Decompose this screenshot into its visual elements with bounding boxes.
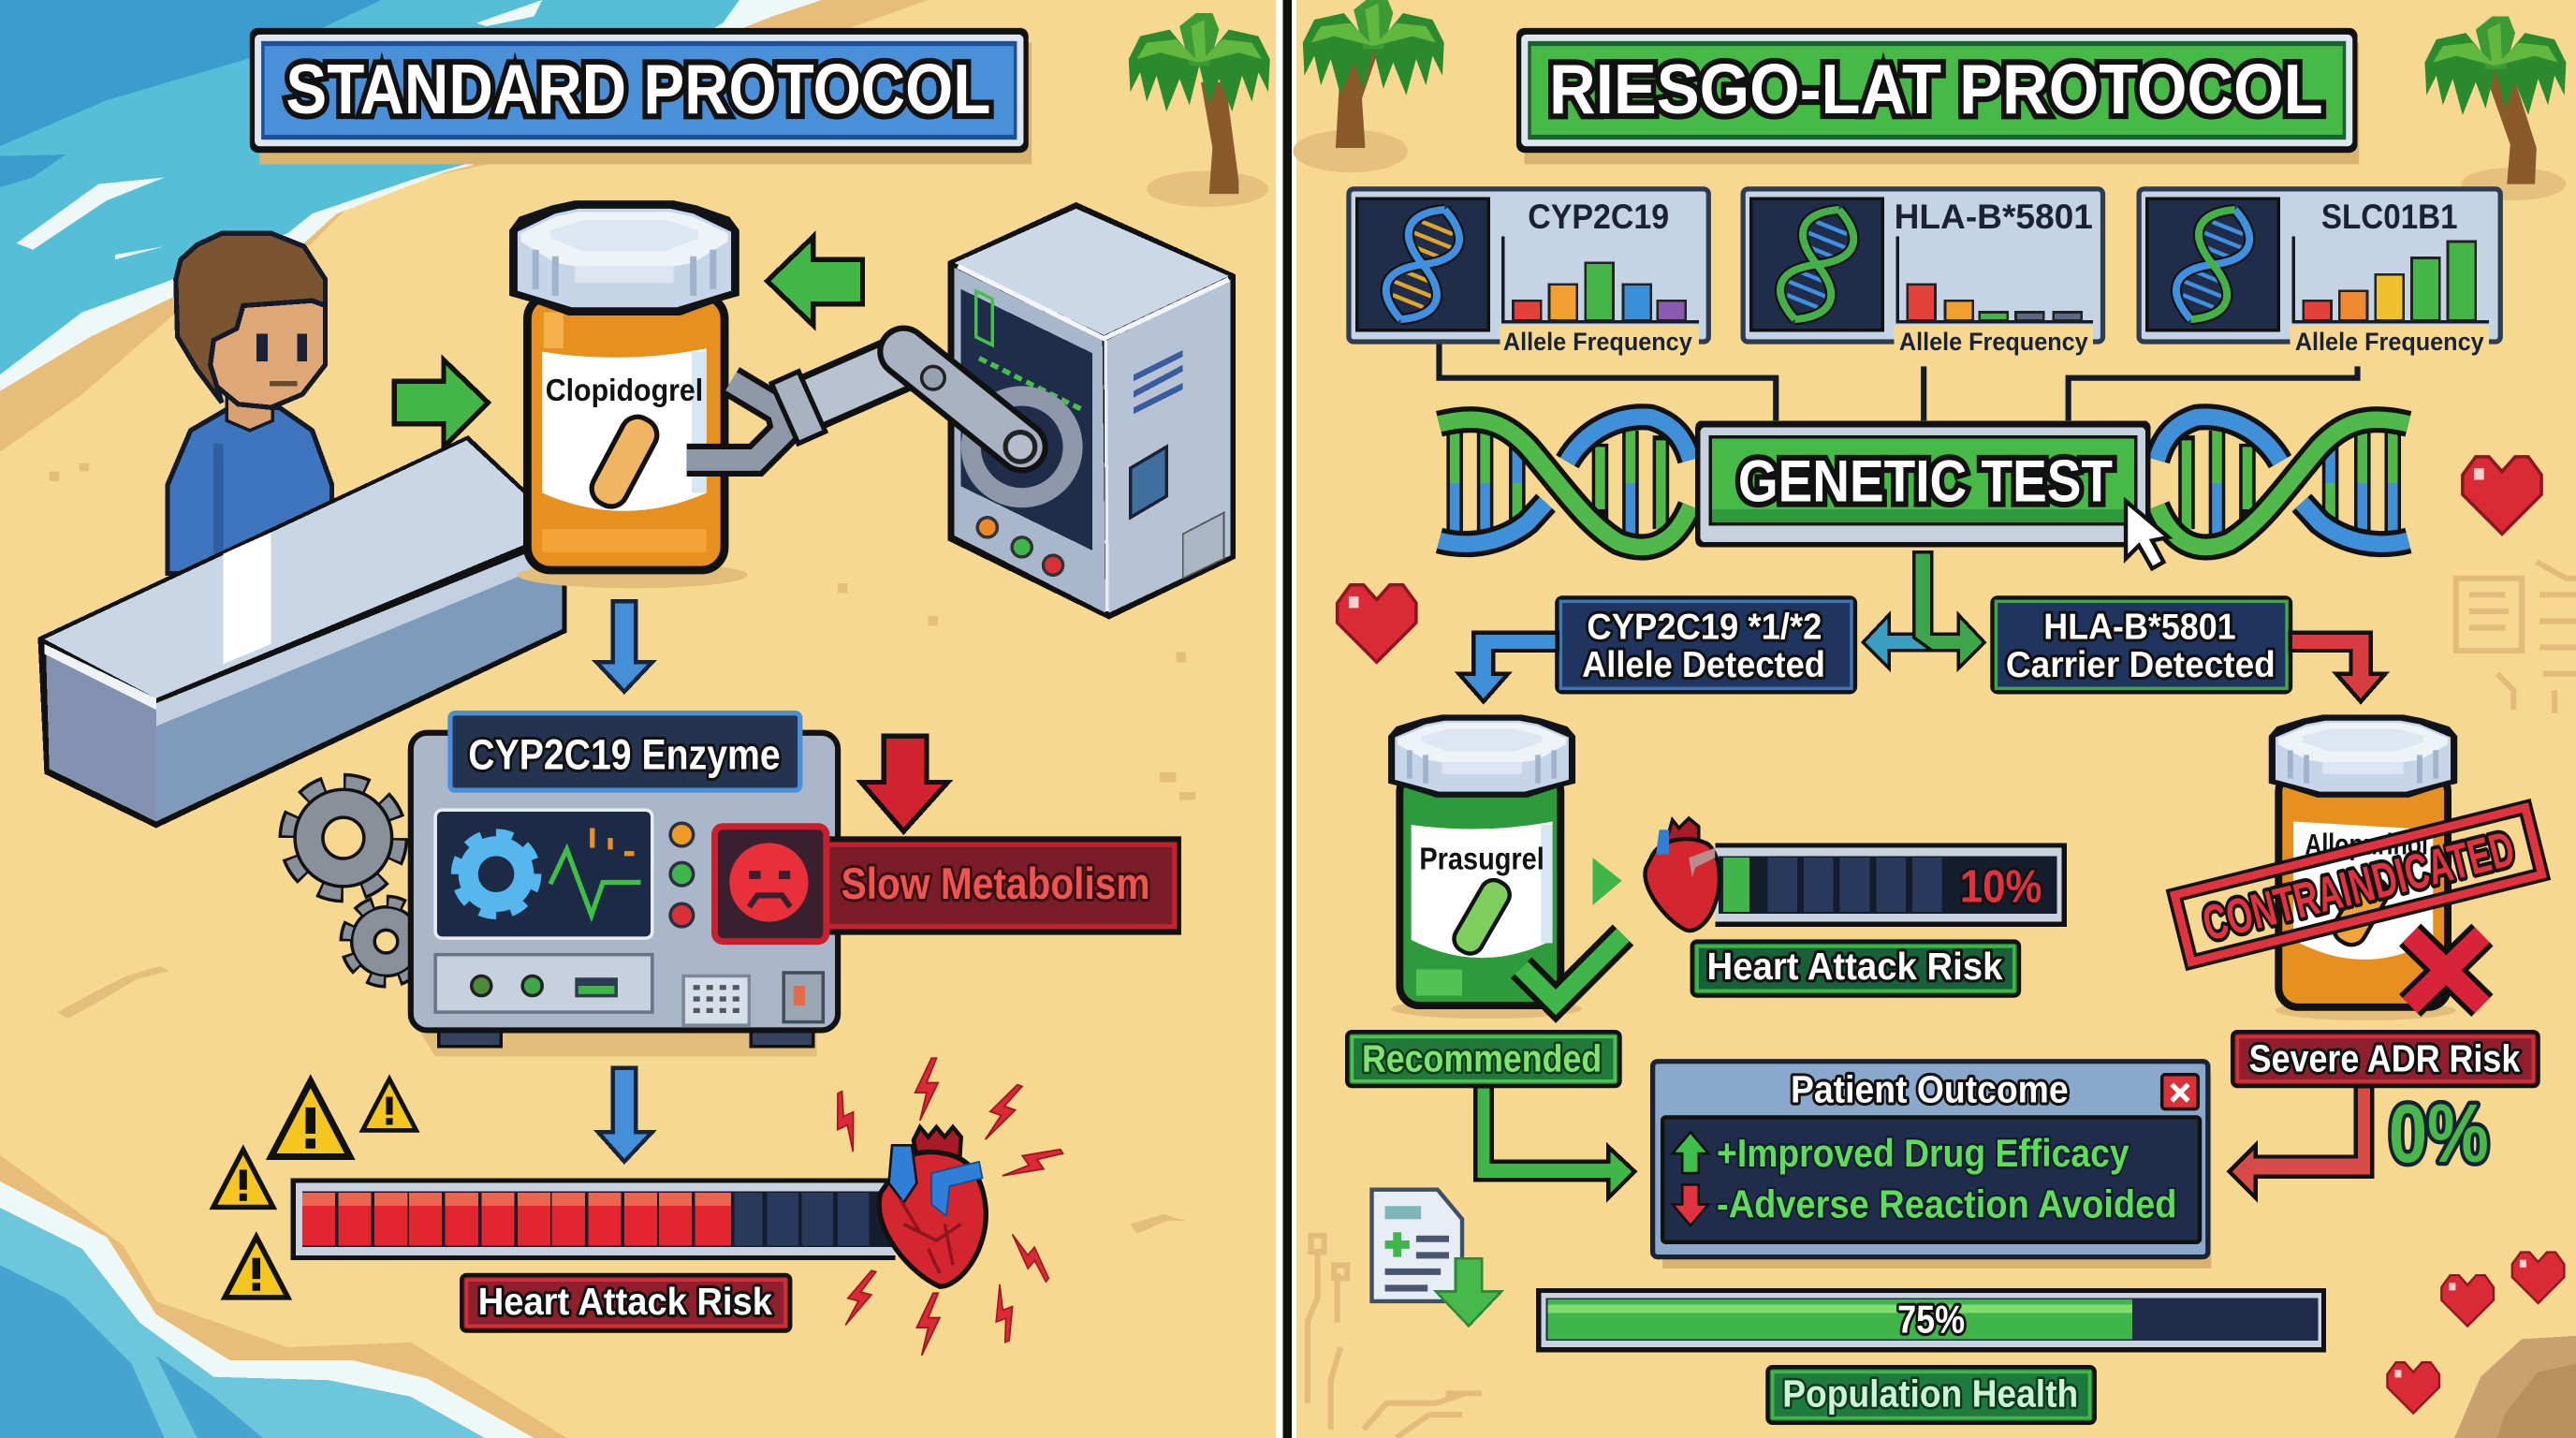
palm tree: right	[2424, 17, 2566, 200]
label: population health: Population Health	[1782, 1372, 2078, 1415]
label: CYP2C19 allele detected	[1558, 598, 1854, 692]
robot arm	[687, 352, 1073, 498]
status lights	[670, 823, 694, 927]
arrow: red down	[861, 736, 948, 831]
gears	[287, 782, 426, 981]
label: HLA-B*5801 carrier detected: Carrier Detected	[2006, 645, 2276, 685]
title: RIESGO-LAT protocol	[1516, 28, 2359, 165]
drug name label: Allopurinol	[2305, 828, 2428, 861]
heart: right	[2463, 457, 2541, 534]
card: CYP2C19: CYP2C19	[1528, 198, 1669, 236]
pill bottle: clopidogrel	[509, 200, 748, 588]
arrow: split from test	[1863, 552, 1984, 668]
pill bottle: prasugrel	[1388, 714, 1582, 1019]
arrow: small pointer	[1592, 856, 1623, 907]
card: HLA-B*5801: HLA-B*5801	[1895, 198, 2093, 236]
rock	[2454, 1336, 2576, 1438]
label: CYP2C19 allele detected: Allele Detected	[1582, 645, 1825, 685]
pill	[2329, 872, 2393, 950]
label: HLA-B*5801 carrier detected	[1993, 598, 2291, 692]
impact bolts	[824, 1058, 1064, 1356]
ecg trace	[550, 849, 641, 916]
icon: small heart	[1645, 818, 1720, 931]
card: HLA-B*5801	[1743, 189, 2102, 359]
pill	[586, 411, 663, 512]
arrow: to bottle from machine	[768, 237, 862, 325]
palm tree: standard panel	[1129, 13, 1270, 207]
arrow: recommended to outcome	[1475, 1086, 1634, 1197]
circuit decoration: bottom-left	[1308, 1236, 1482, 1438]
arrow: to contraindicated drug	[2291, 633, 2385, 701]
label: recommended: Recommended	[1362, 1036, 1602, 1079]
warning icons	[213, 1078, 417, 1298]
bar: heart attack risk low	[1715, 843, 2067, 927]
patient figure	[168, 233, 332, 574]
button: genetic test	[1695, 420, 2150, 547]
divider	[1276, 0, 1296, 1438]
lower control panel	[435, 955, 823, 1025]
pill	[1449, 875, 1515, 959]
card: CYP2C19: Allele Frequency	[1503, 327, 1692, 356]
empty segments	[735, 1193, 869, 1245]
bar chart: allele frequency	[1503, 237, 1699, 322]
icon: sad face	[729, 843, 809, 922]
window: patient outcome: Patient Outcome	[1791, 1068, 2069, 1111]
bar: heart attack risk high	[291, 1178, 896, 1260]
card: SLCO1B1: Allele Frequency	[2295, 327, 2484, 356]
bar: population health: 75%	[1897, 1297, 1965, 1341]
title: standard protocol: STANDARD PROTOCOL	[285, 50, 990, 128]
label: severe ADR risk: Severe ADR Risk	[2249, 1036, 2521, 1079]
arrow: severe ADR to outcome	[2230, 1086, 2372, 1197]
icon: mouse cursor	[2126, 501, 2169, 568]
window: patient outcome	[1653, 1062, 2211, 1269]
dna helix: right	[2157, 417, 2408, 547]
label: CYP2C19 enzyme	[450, 713, 800, 790]
callout: slow metabolism: Slow Metabolism	[842, 859, 1150, 909]
panel: RIESGO-LAT protocol	[1293, 0, 2576, 1438]
dna helix: left	[1439, 417, 1690, 547]
icon: checkmark	[1521, 935, 1623, 1003]
screen	[435, 810, 652, 938]
heart: left	[1338, 585, 1416, 662]
enzyme machine	[287, 713, 838, 1056]
close button	[2162, 1075, 2198, 1109]
arrow: report down	[1436, 1258, 1501, 1326]
beach: bottom-left sea	[0, 1155, 567, 1438]
beach: top-left sea	[0, 0, 929, 452]
icon: red X	[2410, 935, 2482, 1005]
value: 10%: 10%	[1960, 862, 2042, 913]
connectors: genes to test	[1439, 344, 2358, 420]
bar: population health	[1536, 1288, 2326, 1352]
drug name label: Clopidogrel	[546, 374, 703, 408]
machine: dispensing server	[948, 202, 1236, 620]
label: HLA-B*5801 carrier detected: HLA-B*5801	[2043, 608, 2236, 648]
panel: standard protocol	[0, 0, 1270, 1438]
window: patient outcome: +Improved Drug Efficacy	[1717, 1131, 2130, 1175]
red segments	[302, 1193, 731, 1245]
icon: DNA	[2167, 200, 2259, 330]
card: CYP2C19	[1349, 189, 1708, 359]
icon: blue gear	[457, 835, 535, 914]
title: RIESGO-LAT protocol: RIESGO-LAT PROTOCOL	[1549, 50, 2323, 128]
icon: up arrow	[1673, 1132, 1708, 1173]
button: genetic test: GENETIC TEST	[1738, 448, 2113, 514]
arrow: bottle to enzyme	[596, 601, 652, 692]
sand specks	[50, 463, 1196, 1234]
arrow: to prasugrel	[1459, 633, 1558, 701]
palm tree: left	[1293, 0, 1444, 172]
label: CYP2C19 allele detected: CYP2C19 *1/*2	[1587, 608, 1822, 648]
circuit decoration: right	[2456, 562, 2576, 713]
window: patient outcome: -Adverse Reaction Avoided	[1717, 1181, 2176, 1225]
label: heart attack risk (green): Heart Attack Risk	[1707, 945, 2003, 988]
bar chart: allele frequency	[2293, 237, 2489, 322]
counter	[37, 435, 567, 829]
card: SLCO1B1	[2139, 189, 2500, 359]
icon: anatomical heart	[879, 1127, 986, 1286]
pill bottle: contraindicated drug	[2269, 714, 2457, 1020]
label: heart attack risk: Heart Attack Risk	[478, 1280, 772, 1323]
callout: slow metabolism	[714, 827, 1178, 942]
arrow: patient to bottle	[394, 360, 488, 447]
card: SLCO1B1: SLC01B1	[2321, 198, 2458, 236]
icon: DNA	[1771, 200, 1863, 330]
icon: down arrow	[1673, 1184, 1708, 1225]
arrow: enzyme to risk	[598, 1068, 652, 1162]
title: standard protocol	[250, 28, 1032, 165]
label: CYP2C19 enzyme: CYP2C19 Enzyme	[468, 730, 781, 778]
hearts: bottom-right	[2387, 1253, 2564, 1414]
value: 0%: 0%	[2389, 1088, 2489, 1180]
bar chart: allele frequency	[1897, 237, 2093, 322]
drug name label: Prasugrel	[1419, 842, 1544, 876]
icon: DNA	[1377, 200, 1469, 330]
icon: report document	[1372, 1190, 1462, 1301]
card: HLA-B*5801: Allele Frequency	[1899, 327, 2088, 356]
